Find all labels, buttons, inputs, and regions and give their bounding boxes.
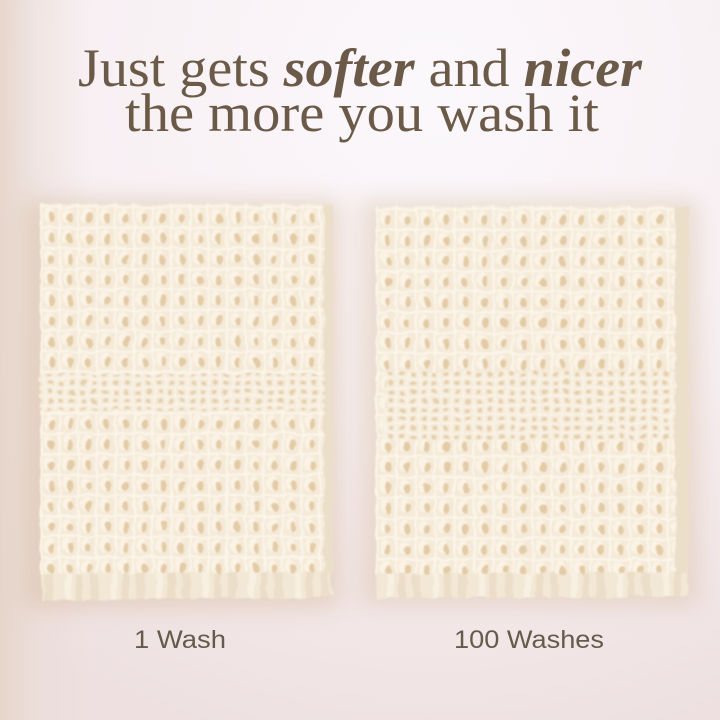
waffle body (376, 206, 688, 574)
waffle body (40, 204, 332, 574)
title: the more you wash it (125, 83, 599, 143)
towel: 100 washes (360, 200, 698, 606)
puckered cells (384, 410, 684, 440)
ruffled hem (376, 572, 690, 599)
title: Just gets softer and nicer (78, 38, 643, 98)
woven middle band (386, 372, 674, 410)
caption: 1 wash: 1 Wash (134, 626, 226, 654)
caption: 100 washes: 100 Washes (454, 626, 604, 654)
ruffled hem (41, 572, 332, 601)
woven middle band (40, 374, 332, 410)
title (78, 38, 643, 143)
towel: 1 wash (24, 200, 340, 608)
selvedge edge (324, 204, 333, 574)
selvedge edge (675, 206, 689, 574)
